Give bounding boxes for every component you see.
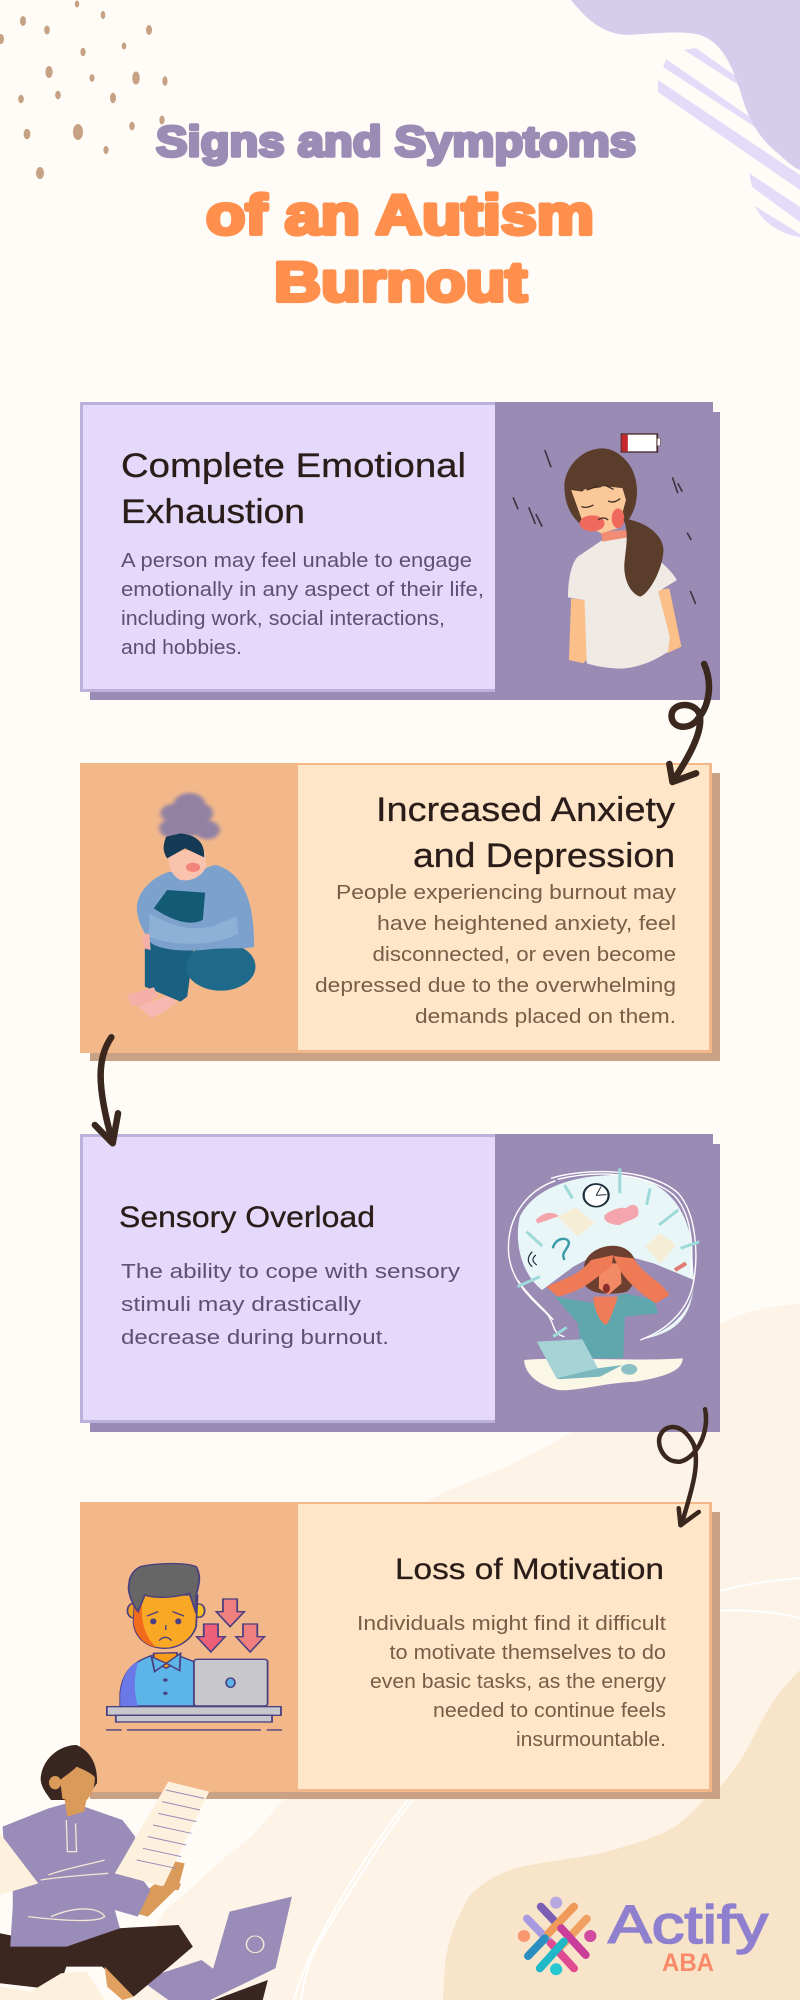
text block: even basic tasks, as the energy	[370, 1671, 666, 1693]
icon: overwhelmed woman	[508, 1168, 699, 1390]
heading: Exhaustion	[121, 493, 305, 531]
heading: Complete Emotional	[121, 447, 466, 485]
decoration: tan wave	[443, 1670, 800, 2000]
text block: depressed due to the overwhelming	[315, 975, 676, 997]
title	[156, 118, 636, 313]
text block	[315, 882, 676, 1028]
text block	[357, 1613, 667, 1751]
heading: Sensory Overload	[119, 1201, 375, 1234]
arrow: panel 3 to panel 4	[659, 1409, 706, 1525]
panel: sensory overload	[80, 1134, 720, 1432]
text block: needed to continue feels	[433, 1700, 666, 1722]
decoration: stripes	[658, 48, 800, 237]
text block: have heightened anxiety, feel	[377, 913, 676, 935]
decoration: purple blob	[571, 0, 800, 170]
title: Signs and Symptoms	[156, 118, 636, 166]
text block: Individuals might find it difficult	[357, 1613, 667, 1635]
decoration: white curves	[294, 1578, 800, 2000]
arrow: panel 1 to panel 2	[669, 664, 709, 782]
text block: decrease during burnout.	[121, 1327, 389, 1349]
arrow: panel 2 to panel 3	[95, 1037, 118, 1143]
text block: stimuli may drastically	[121, 1294, 361, 1316]
icon: man with laptop and down arrows	[106, 1564, 282, 1730]
title: Burnout	[274, 250, 527, 313]
panel: loss of motivation	[80, 1502, 720, 1799]
text block: to motivate themselves to do	[390, 1642, 666, 1664]
text block: emotionally in any aspect of their life,	[121, 579, 484, 601]
text block	[121, 550, 484, 659]
text block	[121, 1261, 460, 1349]
heading: and Depression	[413, 837, 675, 875]
text block: and hobbies.	[121, 637, 242, 659]
heading	[121, 447, 466, 531]
icon: exhausted woman	[513, 434, 696, 669]
decoration: cream wave	[120, 1304, 800, 2000]
icon: sad person with cloud	[127, 793, 256, 1018]
heading	[376, 791, 675, 875]
logo: Actify ABA: ABA	[662, 1949, 714, 1977]
text block: disconnected, or even become	[372, 944, 676, 966]
logo mark	[518, 1897, 596, 1975]
title: of an Autism	[206, 183, 594, 246]
heading: Loss of Motivation	[395, 1553, 664, 1586]
text block: A person may feel unable to engage	[121, 550, 472, 572]
panel: complete emotional exhaustion	[80, 402, 720, 700]
decoration: dots	[0, 0, 168, 179]
text block: The ability to cope with sensory	[121, 1261, 460, 1283]
illustration: person reading papers with laptop	[0, 1745, 292, 2000]
panel: increased anxiety and depression	[80, 763, 720, 1061]
logo: Actify ABA	[518, 1895, 768, 1977]
heading: Increased Anxiety	[376, 791, 675, 829]
logo wordmark: Actify	[608, 1895, 768, 1955]
text block: People experiencing burnout may	[336, 882, 676, 904]
text block: insurmountable.	[516, 1729, 666, 1751]
text block: including work, social interactions,	[121, 608, 445, 630]
text block: demands placed on them.	[415, 1006, 676, 1028]
